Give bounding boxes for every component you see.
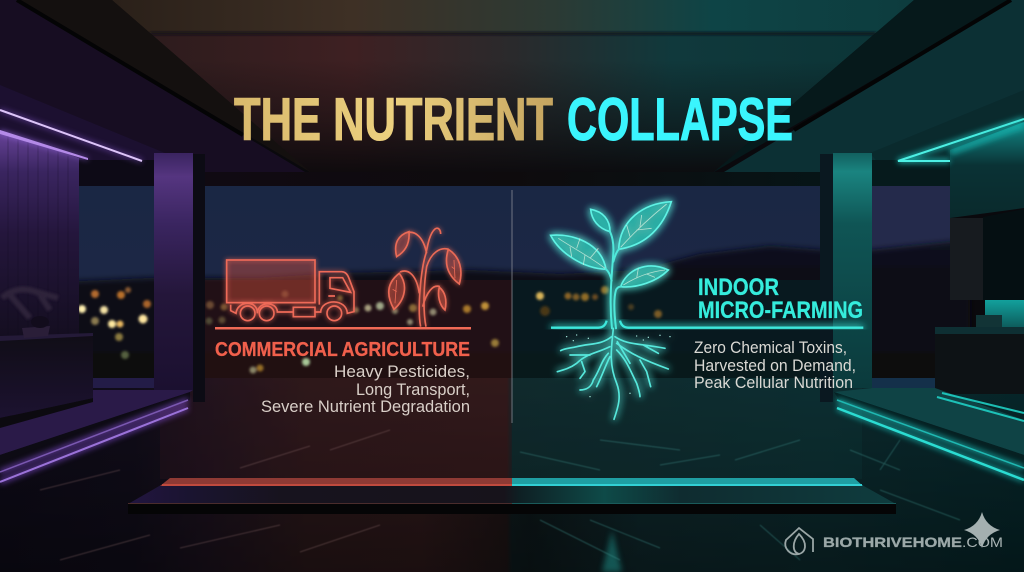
heading: MICRO-FARMING (698, 297, 863, 324)
teal neon light strips (837, 119, 1024, 480)
left vase plant (2, 289, 58, 338)
description: Heavy Pesticides, (334, 362, 470, 381)
icon: wilting plant (389, 228, 461, 327)
roots (557, 328, 668, 419)
ground line with gap for stem (551, 321, 863, 328)
center divider (512, 190, 513, 423)
watermark logo: .COM (962, 534, 1003, 550)
title: COLLAPSE (567, 86, 793, 153)
ceiling (0, 0, 1024, 186)
watermark logo (785, 512, 1003, 554)
root sparkle dots (566, 334, 671, 397)
description (694, 338, 856, 392)
left purple wall and step (0, 130, 193, 472)
heading (698, 274, 863, 324)
right kitchen cabinets (834, 122, 1024, 465)
heading: COMMERCIAL AGRICULTURE (215, 339, 470, 361)
heading: INDOOR (698, 274, 779, 301)
description: Severe Nutrient Degradation (261, 397, 470, 416)
panel: commercial agriculture (215, 228, 471, 416)
central stage platform (128, 478, 896, 514)
icon: glowing plant with roots (551, 202, 671, 419)
description (261, 362, 470, 416)
window with night sky (60, 186, 970, 400)
purple neon light strips (0, 110, 188, 482)
floor (0, 378, 1024, 572)
icon: sparkle (964, 512, 1000, 548)
description: Long Transport, (356, 380, 470, 399)
description: Zero Chemical Toxins, (694, 338, 847, 357)
icon: house with leaf (785, 528, 813, 554)
brand name: BIOTHRIVEHOME (823, 534, 962, 550)
left column (154, 153, 205, 402)
icon: delivery truck (227, 260, 354, 321)
title: THE NUTRIENT (234, 86, 553, 153)
panel: indoor micro-farming (551, 202, 863, 419)
description: Harvested on Demand, (694, 356, 856, 375)
right column (820, 153, 872, 402)
description: Peak Cellular Nutrition (694, 373, 853, 392)
ground line (215, 327, 471, 330)
city bokeh lights (78, 286, 662, 374)
